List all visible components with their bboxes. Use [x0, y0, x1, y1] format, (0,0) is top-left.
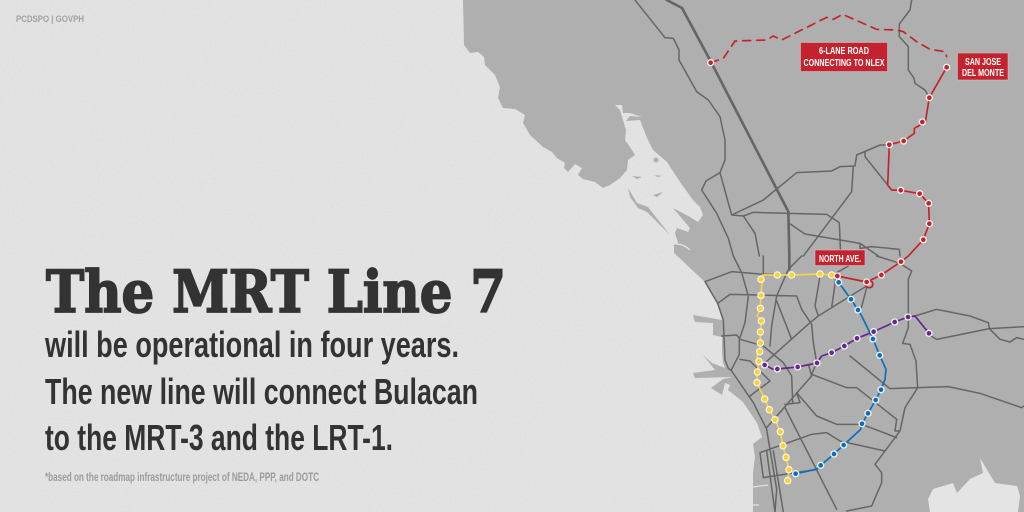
label: San Jose del Monte: SAN JOSE — [965, 56, 1001, 68]
title: The MRT Line 7 — [46, 258, 506, 326]
label: North Ave. — [815, 250, 865, 266]
label: 6-lane road: 6-LANE ROAD — [819, 45, 869, 57]
footnote: *based on the roadmap infrastructure project of NEDA, PPP, and DOTC — [45, 472, 319, 484]
purple stations — [762, 314, 932, 372]
purple LRT-2 track — [765, 316, 929, 369]
blue MRT-3 track — [796, 282, 886, 474]
blue stations — [793, 279, 884, 477]
expressway end — [785, 256, 793, 269]
expressway — [667, 0, 789, 256]
peninsula inlets — [628, 175, 670, 235]
yellow LRT-1 track — [757, 274, 832, 481]
description text: will be operational in four years. — [44, 324, 459, 365]
coastal slivers — [676, 244, 768, 505]
road network south — [705, 256, 1024, 512]
red stations — [708, 60, 950, 243]
road network north — [635, 0, 929, 256]
red stations south — [834, 259, 904, 285]
peninsula pond — [654, 158, 658, 162]
northern roads — [635, 0, 929, 256]
red track — [888, 67, 947, 256]
label: San Jose del Monte: DEL MONTE — [962, 67, 1004, 79]
southern roads — [705, 256, 1024, 512]
label: 6-lane road: CONNECTING TO NLEX — [804, 57, 884, 69]
dashed 6-lane road — [711, 14, 947, 63]
description text — [44, 324, 478, 458]
land mass — [463, 0, 1024, 512]
Laguna lake — [928, 458, 1020, 512]
red track to North Ave — [837, 256, 908, 288]
label: 6-lane road — [800, 42, 888, 72]
source credit: PCDSPO | GOVPH — [16, 14, 84, 25]
red line: MRT-7 north section — [708, 14, 950, 256]
description text: to the MRT-3 and the LRT-1. — [45, 417, 393, 458]
description text: The new line will connect Bulacan — [45, 371, 478, 412]
label: San Jose del Monte — [958, 53, 1008, 80]
metro lines south — [754, 256, 932, 484]
map of Metro Manila and Bulacan — [463, 0, 1024, 512]
label: North Ave.: NORTH AVE. — [819, 253, 861, 265]
yellow stations — [754, 271, 835, 484]
